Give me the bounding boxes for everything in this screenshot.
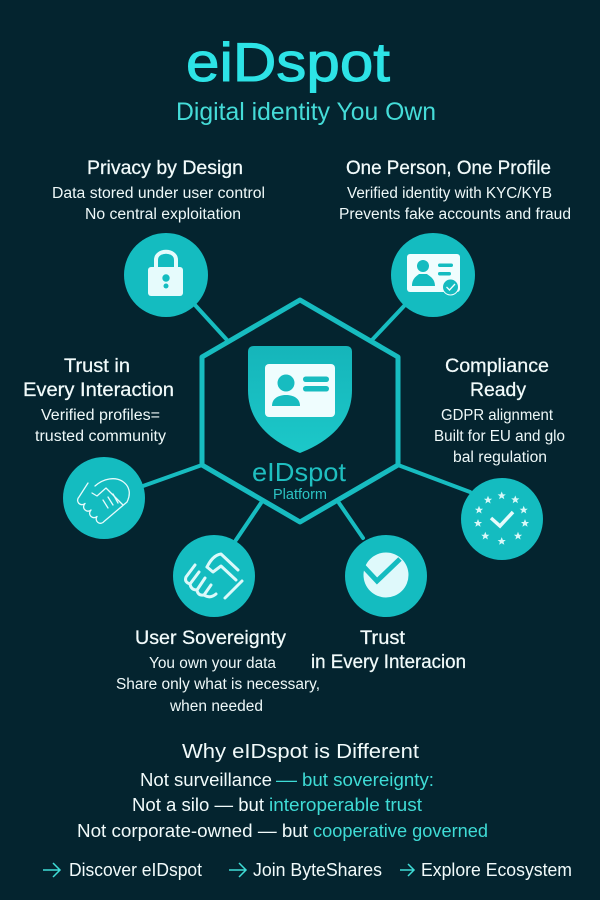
subtitle: Digital identity You Own	[176, 98, 436, 126]
text block: Trust in Every Interaction: trusted community	[35, 428, 166, 445]
title: eiDspot	[186, 31, 390, 93]
call to action: Discover eIDspot: Discover eIDspot	[69, 860, 202, 880]
icon: handshake bottom	[173, 535, 255, 617]
comparison lines: interoperable trust	[269, 795, 422, 815]
comparison lines	[77, 770, 488, 841]
text block: Trust in Every Interacion	[311, 628, 466, 673]
platform name: eIDspot	[252, 457, 347, 487]
text block: Compliance Ready: GDPR alignment	[441, 407, 554, 424]
heading: Why eIDspot is Different: Why eIDspot is Different	[182, 741, 419, 763]
text block: Privacy by Design: Data stored under user control	[52, 185, 265, 202]
text block: Compliance Ready	[434, 356, 565, 466]
icon: shield with ID card	[248, 346, 352, 453]
text block: Compliance Ready: bal regulation	[453, 449, 547, 466]
text block: Trust in Every Interacion: in Every Interacion	[311, 652, 466, 673]
text block: Trust in Every Interacion: Trust	[360, 628, 406, 649]
text block: User Sovereignty: You own your data	[149, 655, 276, 672]
icon: verified ID card	[391, 233, 475, 317]
text block: One Person, One Profile	[339, 158, 571, 223]
text block: Trust in Every Interaction: Verified profiles=	[41, 407, 160, 424]
text block: One Person, One Profile: Verified identity with KYC/KYB	[347, 185, 552, 202]
text block: Trust in Every Interaction	[23, 356, 174, 445]
comparison lines: Not surveillance	[140, 770, 272, 790]
text block: Compliance Ready: Built for EU and glo	[434, 428, 565, 445]
text block: Compliance Ready: Ready	[470, 380, 527, 401]
comparison lines: —	[276, 770, 297, 790]
text block: One Person, One Profile: Prevents fake accounts and fraud	[339, 206, 571, 223]
text block: Privacy by Design: Privacy by Design	[87, 158, 243, 179]
comparison lines: but sovereignty:	[302, 770, 434, 790]
icon: padlock	[124, 233, 208, 317]
text block: One Person, One Profile: One Person, One Profile	[346, 158, 551, 179]
text block: User Sovereignty	[116, 628, 320, 715]
comparison lines: Not a silo — but	[132, 795, 264, 815]
comparison lines: Not corporate-owned — but	[77, 821, 308, 841]
text block: Privacy by Design: No central exploitation	[85, 206, 241, 223]
call to action: Join ByteShares: Join ByteShares	[253, 860, 382, 880]
central hexagon platform	[202, 300, 398, 522]
text block: Privacy by Design	[52, 158, 265, 223]
text block: Trust in Every Interaction: Every Interaction	[23, 380, 174, 401]
text block: User Sovereignty: Share only what is necessary,	[116, 676, 320, 693]
comparison lines: cooperative governed	[313, 821, 488, 841]
platform label: Platform	[273, 487, 327, 503]
icon: check mark	[345, 535, 427, 617]
text block: User Sovereignty: when needed	[169, 698, 263, 715]
call to action: Explore Ecosystem: Explore Ecosystem	[421, 860, 572, 880]
text block: Compliance Ready: Compliance	[445, 356, 549, 377]
connector lines	[143, 305, 470, 540]
icon: handshake left	[63, 457, 145, 539]
icon: EU stars with check	[461, 478, 543, 560]
text block: Trust in Every Interaction: Trust in	[64, 356, 130, 377]
hexagon outline	[202, 300, 398, 522]
text block: User Sovereignty: User Sovereignty	[135, 628, 287, 649]
